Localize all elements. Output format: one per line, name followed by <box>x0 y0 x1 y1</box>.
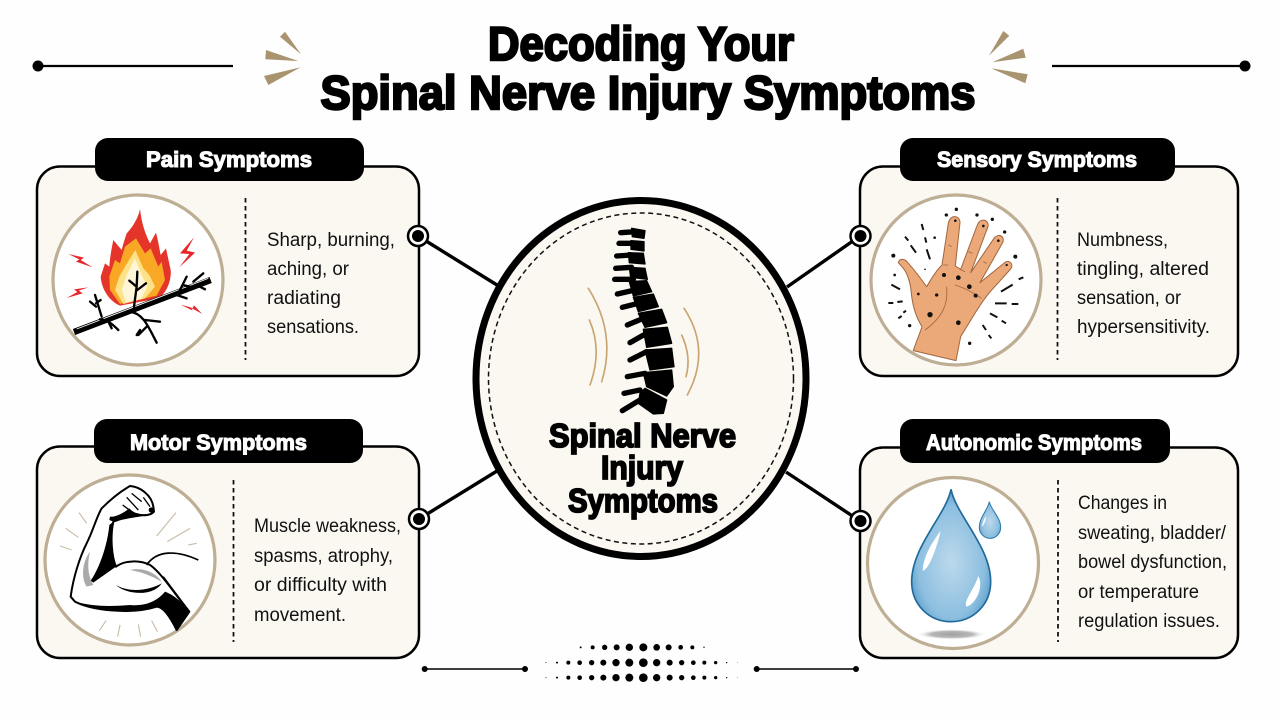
icon: tingling hand <box>871 195 1041 365</box>
text: autonomic description: bowel dysfunction, <box>1078 552 1227 573</box>
text: sensory description: sensation, or <box>1077 288 1182 309</box>
heading: autonomic symptoms: Autonomic Symptoms <box>926 430 1142 455</box>
text: motor description: Muscle weakness, <box>254 516 401 537</box>
heading: motor symptoms: Motor Symptoms <box>130 430 307 455</box>
bottom left line <box>422 666 528 672</box>
divider <box>1056 198 1058 360</box>
text: sensory description: Numbness, <box>1077 230 1168 251</box>
central hub <box>476 200 806 556</box>
title <box>320 17 976 119</box>
bottom right line <box>754 666 859 672</box>
connector node: sensory <box>850 226 870 246</box>
heading: sensory symptoms: Sensory Symptoms <box>937 147 1137 172</box>
text: pain description: radiating <box>267 288 341 309</box>
left title ornament <box>32 32 301 85</box>
hub label <box>549 417 736 519</box>
text: motor description: or difficulty with <box>254 575 387 596</box>
icon: spine <box>588 228 699 414</box>
title: Decoding Your <box>488 17 794 70</box>
text: autonomic description: regulation issues. <box>1078 611 1220 632</box>
text: sensory description: tingling, altered <box>1077 259 1209 280</box>
hub label: Symptoms <box>568 482 718 519</box>
text: sensory description: hypersensitivity. <box>1077 317 1210 338</box>
text: motor description: movement. <box>254 605 346 626</box>
right title ornament <box>989 31 1250 83</box>
connector node: motor <box>409 509 429 529</box>
hub label: Spinal Nerve <box>549 417 736 454</box>
connector node: autonomic <box>850 511 870 531</box>
text: autonomic description: or temperature <box>1078 582 1199 603</box>
text: sensory description <box>1077 230 1210 338</box>
connector node: pain <box>408 226 428 246</box>
text: pain description: aching, or <box>267 259 350 280</box>
panel: pain symptoms <box>37 138 419 376</box>
title: Spinal Nerve Injury Symptoms <box>320 66 976 119</box>
panel: autonomic symptoms <box>860 419 1238 658</box>
heading: pain symptoms <box>95 138 364 181</box>
hub label: Injury <box>601 449 684 486</box>
divider <box>244 198 246 360</box>
halftone dots <box>545 643 738 682</box>
panel: motor symptoms <box>37 419 419 658</box>
connector lines <box>418 236 860 521</box>
text: motor description: spasms, atrophy, <box>254 546 393 567</box>
icon: flexed arm muscle <box>45 475 215 645</box>
icon: burning nerve flame <box>53 195 223 365</box>
text: pain description: Sharp, burning, <box>267 230 395 251</box>
text: autonomic description: Changes in <box>1078 493 1167 514</box>
text: autonomic description <box>1078 493 1227 632</box>
text: pain description: sensations. <box>267 317 359 338</box>
divider <box>232 480 234 642</box>
text: autonomic description: sweating, bladder/ <box>1078 523 1227 544</box>
text: pain description <box>267 230 395 338</box>
divider <box>1057 480 1059 642</box>
heading: autonomic symptoms <box>900 419 1170 463</box>
heading: motor symptoms <box>94 419 363 463</box>
panel: sensory symptoms <box>860 138 1238 376</box>
heading: pain symptoms: Pain Symptoms <box>146 147 312 172</box>
heading: sensory symptoms <box>900 138 1175 181</box>
text: motor description <box>254 516 401 626</box>
icon: water drops <box>868 478 1038 648</box>
